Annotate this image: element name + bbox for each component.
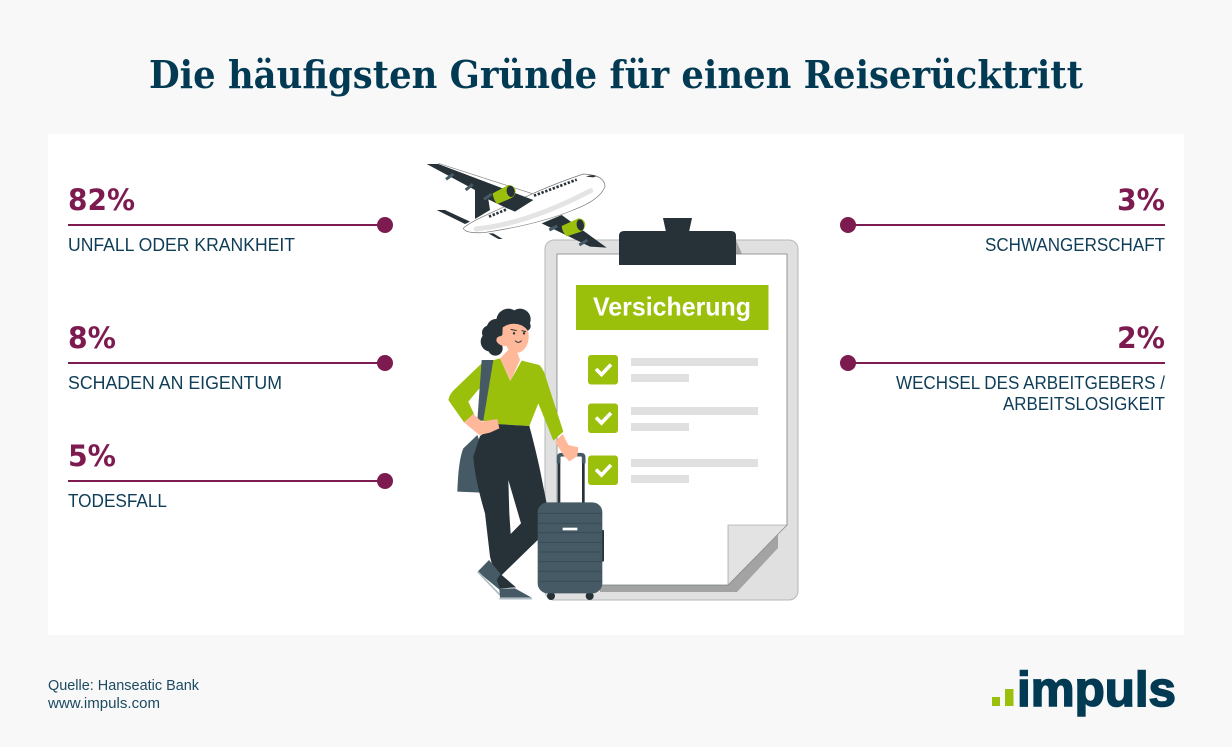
stat: 82% accident or illness: 82% [68, 183, 135, 217]
stat: 8% property damage: SCHADEN AN EIGENTUM [68, 373, 282, 393]
stat: 82% accident or illness: UNFALL ODER KRANKHEIT [68, 235, 295, 255]
suitcase [559, 455, 583, 503]
source note: www.impuls.com [47, 696, 160, 712]
logo: impuls: impuls [1017, 663, 1176, 717]
trousers [473, 424, 547, 589]
hair [481, 309, 531, 356]
stat: 3% pregnancy: 3% [1117, 183, 1165, 217]
stat: 3% pregnancy: SCHWANGERSCHAFT [985, 235, 1165, 255]
skin: neck and face [496, 324, 529, 381]
shirt [448, 358, 563, 441]
banner: Versicherung [576, 285, 768, 330]
stat: 3% pregnancy [840, 183, 1165, 255]
source note [47, 678, 200, 712]
hand on handle [555, 434, 578, 461]
panel: main content [48, 134, 1184, 635]
strap [477, 360, 493, 421]
checklist [588, 355, 758, 485]
stat: 8% property damage: 8% [68, 321, 116, 355]
title: Die häufigsten Gründe für einen Reiserücktritt [149, 52, 1083, 97]
stat: 2% job change or unemployment: WECHSEL DES ARBEITGEBERS / [896, 373, 1165, 393]
stat: 8% property damage [68, 321, 393, 393]
stat: 2% job change or unemployment: 2% [1117, 321, 1165, 355]
bag [457, 435, 487, 493]
illustration: traveller with suitcase [448, 309, 604, 600]
banner: Versicherung: Versicherung [593, 292, 751, 322]
stat: 5% death: TODESFALL [68, 491, 167, 511]
stat: 5% death [68, 439, 393, 511]
stat: 5% death: 5% [68, 439, 116, 473]
stat: 2% job change or unemployment: ARBEITSLOSIGKEIT [1003, 394, 1165, 414]
hand on hip [464, 414, 499, 435]
source note: Quelle: Hanseatic Bank [48, 678, 200, 694]
shoes [478, 560, 501, 591]
stat: 2% job change or unemployment [840, 321, 1165, 414]
illustration: insurance clipboard [545, 218, 798, 600]
illustration: airplane [427, 163, 607, 248]
stat: 82% accident or illness [68, 183, 393, 255]
